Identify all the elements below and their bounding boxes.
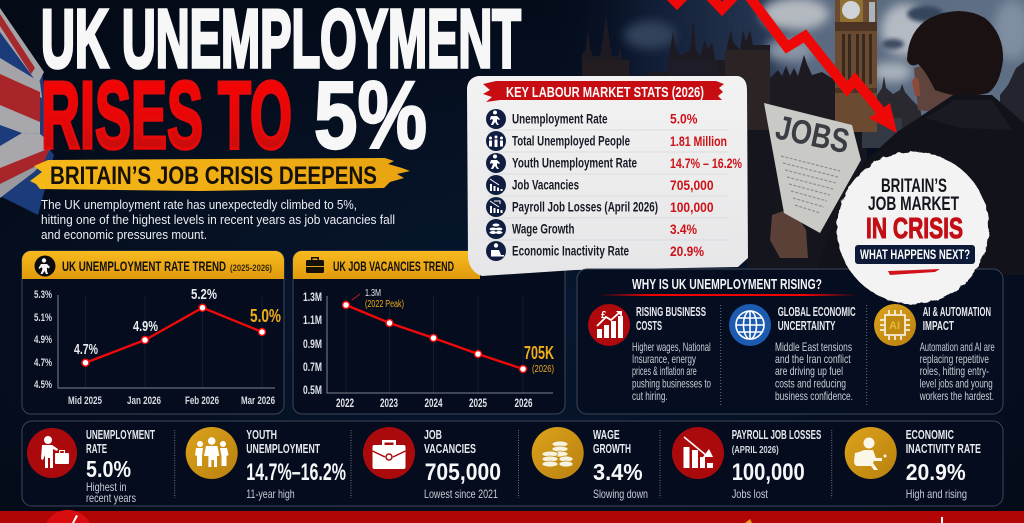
line chart: vacancies: 705K [524, 343, 554, 363]
stat: wage growth [532, 427, 648, 501]
stat: youth unemployment [186, 427, 346, 501]
badge: job market in crisis: WHAT HAPPENS NEXT? [860, 247, 970, 262]
stats heading [483, 81, 724, 102]
cause: AI and automation impact [874, 304, 995, 403]
stats rows: 5.0% [670, 110, 698, 126]
line chart: vacancies: 0.9M [303, 337, 322, 351]
cause: rising business costs: Higher wages, National [632, 340, 711, 354]
header band [293, 251, 480, 279]
stats rows: Total Unemployed People [512, 134, 630, 148]
stats rows: Economic Inactivity Rate [512, 244, 629, 258]
stat: wage growth: WAGE [593, 427, 620, 442]
stat: wage growth: GROWTH [593, 441, 631, 456]
stat: wage growth: 3.4% [593, 459, 643, 485]
photo: London skyline [540, 0, 1024, 272]
stat: youth unemployment: 11-year high [246, 487, 295, 501]
heading: WHY IS UK UNEMPLOYMENT RISING? [632, 276, 822, 293]
intro text: and economic pressures mount. [41, 227, 207, 242]
line chart: vacancies: 2024 [424, 396, 443, 410]
line chart: vacancies: 1.1M [303, 313, 322, 327]
line chart: vacancies: 2026 [514, 396, 533, 410]
cause: global economic uncertainty: and the Iran conflict [775, 352, 851, 366]
line chart: rate: 5.2% [191, 286, 217, 303]
line chart: vacancies: 1.3M [365, 288, 381, 299]
stats rows: 1.81 Million [670, 133, 727, 149]
cause: global economic uncertainty: are driving up fuel [775, 364, 843, 378]
stats rows: Youth Unemployment Rate [512, 156, 637, 170]
stats rows: Wage Growth [512, 222, 574, 236]
stat: job vacancies: 705,000 [425, 459, 501, 486]
badge: job market in crisis: BRITAIN’S [881, 176, 947, 197]
cause: AI and automation impact: roles, hitting entry- [920, 364, 989, 378]
title: RISES TO [41, 62, 292, 169]
line chart: vacancies: (2026) [532, 364, 554, 375]
stat: unemployment rate: Highest in [86, 480, 126, 494]
photo: hand holding newspaper [764, 103, 861, 258]
stat: wage growth: Slowing down [593, 487, 648, 501]
line chart: rate: 5.1% [34, 312, 52, 324]
stat: unemployment rate: RATE [86, 441, 107, 456]
line chart: vacancies: 2022 [336, 396, 354, 410]
photo: man in dark jacket [816, 11, 1024, 275]
badge: job market in crisis: JOB MARKET [868, 194, 959, 215]
stat: youth unemployment: UNEMPLOYMENT [246, 441, 320, 456]
cause: global economic uncertainty: costs and reducing [775, 376, 846, 390]
line chart: vacancies: 0.7M [303, 360, 322, 374]
stat: payroll job losses: PAYROLL JOB LOSSES [732, 427, 821, 442]
line chart: rate: 4.7% [34, 357, 52, 369]
stat: job vacancies: VACANCIES [424, 441, 476, 456]
cause: AI and automation impact: IMPACT [923, 318, 954, 333]
arrow: falling red trend line [668, 0, 897, 133]
photo: hand holding newspaper: JOBS [772, 109, 853, 161]
title: 5% [314, 62, 427, 169]
cause: global economic uncertainty: business confidence. [775, 389, 853, 403]
stat: economic inactivity rate: INACTIVITY RATE [906, 441, 981, 456]
line chart: vacancies: 1.3M [303, 290, 322, 304]
line chart: rate: Feb 2026 [185, 395, 219, 407]
stat: economic inactivity rate: ECONOMIC [906, 427, 954, 442]
chart heading: (2025-2026) [230, 263, 272, 273]
icon: briefcase [306, 257, 324, 273]
stat: economic inactivity rate: 20.9% [906, 459, 966, 485]
stats rows: Job Vacancies [512, 178, 579, 192]
title [41, 0, 521, 169]
stat: youth unemployment: YOUTH [246, 427, 277, 442]
icon: person [34, 256, 56, 276]
cause: rising business costs [588, 304, 711, 403]
line chart: rate: 4.9% [34, 334, 52, 346]
cause: rising business costs: cut hiring. [632, 389, 668, 403]
stats rows: 705,000 [670, 177, 714, 193]
stat: payroll job losses: Jobs lost [732, 487, 769, 501]
cause: global economic uncertainty: UNCERTAINTY [778, 318, 836, 333]
stat: payroll job losses [672, 427, 821, 501]
intro text: hitting one of the highest levels in recent years as job vacancies fall [41, 212, 395, 227]
stat: payroll job losses: 100,000 [732, 459, 805, 486]
cause: global economic uncertainty: GLOBAL ECONOMIC [778, 304, 856, 319]
stats rows: 3.4% [670, 221, 697, 237]
cause: global economic uncertainty [729, 304, 856, 403]
line chart: rate: Mar 2026 [241, 395, 275, 407]
line chart: rate: 4.5% [34, 379, 52, 391]
icon: British flag [0, 8, 54, 215]
chart heading: UK UNEMPLOYMENT RATE TREND [62, 258, 226, 274]
cause: AI and automation impact: replacing repetitive [920, 352, 989, 366]
cause: rising business costs: prices & inflation are [632, 364, 697, 378]
line chart: rate: 4.9% [133, 318, 158, 335]
stat: unemployment rate [27, 427, 155, 505]
subtitle banner: BRITAIN’S JOB CRISIS DEEPENS [50, 162, 377, 190]
badge: job market in crisis [837, 152, 989, 304]
panel: unemployment rate trend [22, 251, 284, 414]
line chart: rate [34, 286, 281, 407]
stats rows: 20.9% [670, 243, 704, 259]
cause: rising business costs: Insurance, energy [632, 352, 696, 366]
stat: job vacancies: Lowest since 2021 [424, 487, 498, 501]
line chart: rate: 5.3% [34, 289, 52, 301]
cause: rising business costs: £ [601, 310, 607, 321]
line chart: rate: Mid 2025 [68, 395, 102, 407]
cause: rising business costs: pushing businesses to [632, 376, 711, 390]
stat: payroll job losses: (APRIL 2026) [732, 444, 779, 456]
panel: summary stat strip [22, 421, 1003, 506]
stats rows: 100,000 [670, 199, 714, 215]
intro text: The UK unemployment rate has unexpectedly climbed to 5%, [41, 197, 357, 212]
line chart: vacancies: (2022 Peak) [365, 299, 404, 310]
cause: rising business costs: COSTS [636, 318, 662, 333]
line chart: rate: 5.0% [250, 306, 281, 326]
badge: job market in crisis: IN CRISIS [866, 213, 963, 245]
stats rows [486, 109, 742, 261]
stat: unemployment rate: 5.0% [86, 456, 131, 482]
cause: rising business costs: RISING BUSINESS [636, 304, 706, 319]
cause: global economic uncertainty: Middle East tensions [775, 340, 852, 354]
panel: job vacancies trend [293, 251, 565, 414]
stat: economic inactivity rate: High and rising [906, 487, 967, 501]
chart heading: UK JOB VACANCIES TREND [333, 258, 454, 274]
stat: unemployment rate: recent years [86, 491, 136, 505]
panel: why is unemployment rising [577, 269, 1003, 414]
stat: job vacancies [363, 427, 501, 501]
line chart: vacancies: 0.5M [303, 383, 322, 397]
stat: economic inactivity rate [845, 427, 981, 501]
stat: youth unemployment: 14.7%–16.2% [246, 459, 346, 486]
stats rows: Unemployment Rate [512, 112, 608, 126]
stat: job vacancies: JOB [424, 427, 442, 442]
stat: unemployment rate: UNEMPLOYMENT [86, 427, 155, 442]
line chart: vacancies: 2025 [469, 396, 487, 410]
cause: AI and automation impact: AI [889, 320, 900, 332]
photo: clock tower [835, 0, 877, 132]
header band [22, 251, 284, 279]
line chart: vacancies: 2023 [380, 396, 398, 410]
stats rows: 14.7% – 16.2% [670, 155, 742, 171]
footer band [0, 510, 1024, 523]
line chart: vacancies [303, 288, 554, 410]
stats rows: Payroll Job Losses (April 2026) [512, 200, 658, 214]
line chart: rate: 4.7% [74, 341, 98, 358]
intro text [41, 197, 395, 242]
line chart: rate: Jan 2026 [127, 395, 161, 407]
stats heading: KEY LABOUR MARKET STATS (2026) [506, 84, 704, 101]
panel: key labour market stats [467, 76, 748, 276]
